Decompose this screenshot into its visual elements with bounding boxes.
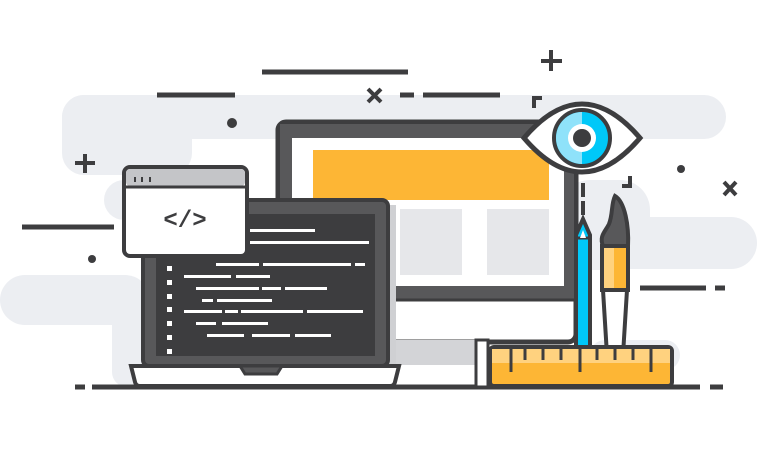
orange banner: [313, 150, 549, 200]
icon: eye: [524, 104, 640, 215]
code window: </>: [163, 208, 207, 235]
monitor: [278, 122, 576, 387]
code lines: [167, 229, 369, 354]
icon: ruler: [490, 347, 672, 386]
icon: paintbrush: [602, 196, 628, 355]
decorations: [22, 50, 736, 387]
background clouds: [0, 95, 757, 387]
laptop base: [131, 366, 399, 386]
code window: [124, 167, 247, 256]
icon: pencil: [576, 219, 590, 355]
stand: [476, 340, 488, 387]
laptop: [131, 200, 399, 386]
content blocks: [400, 209, 462, 275]
